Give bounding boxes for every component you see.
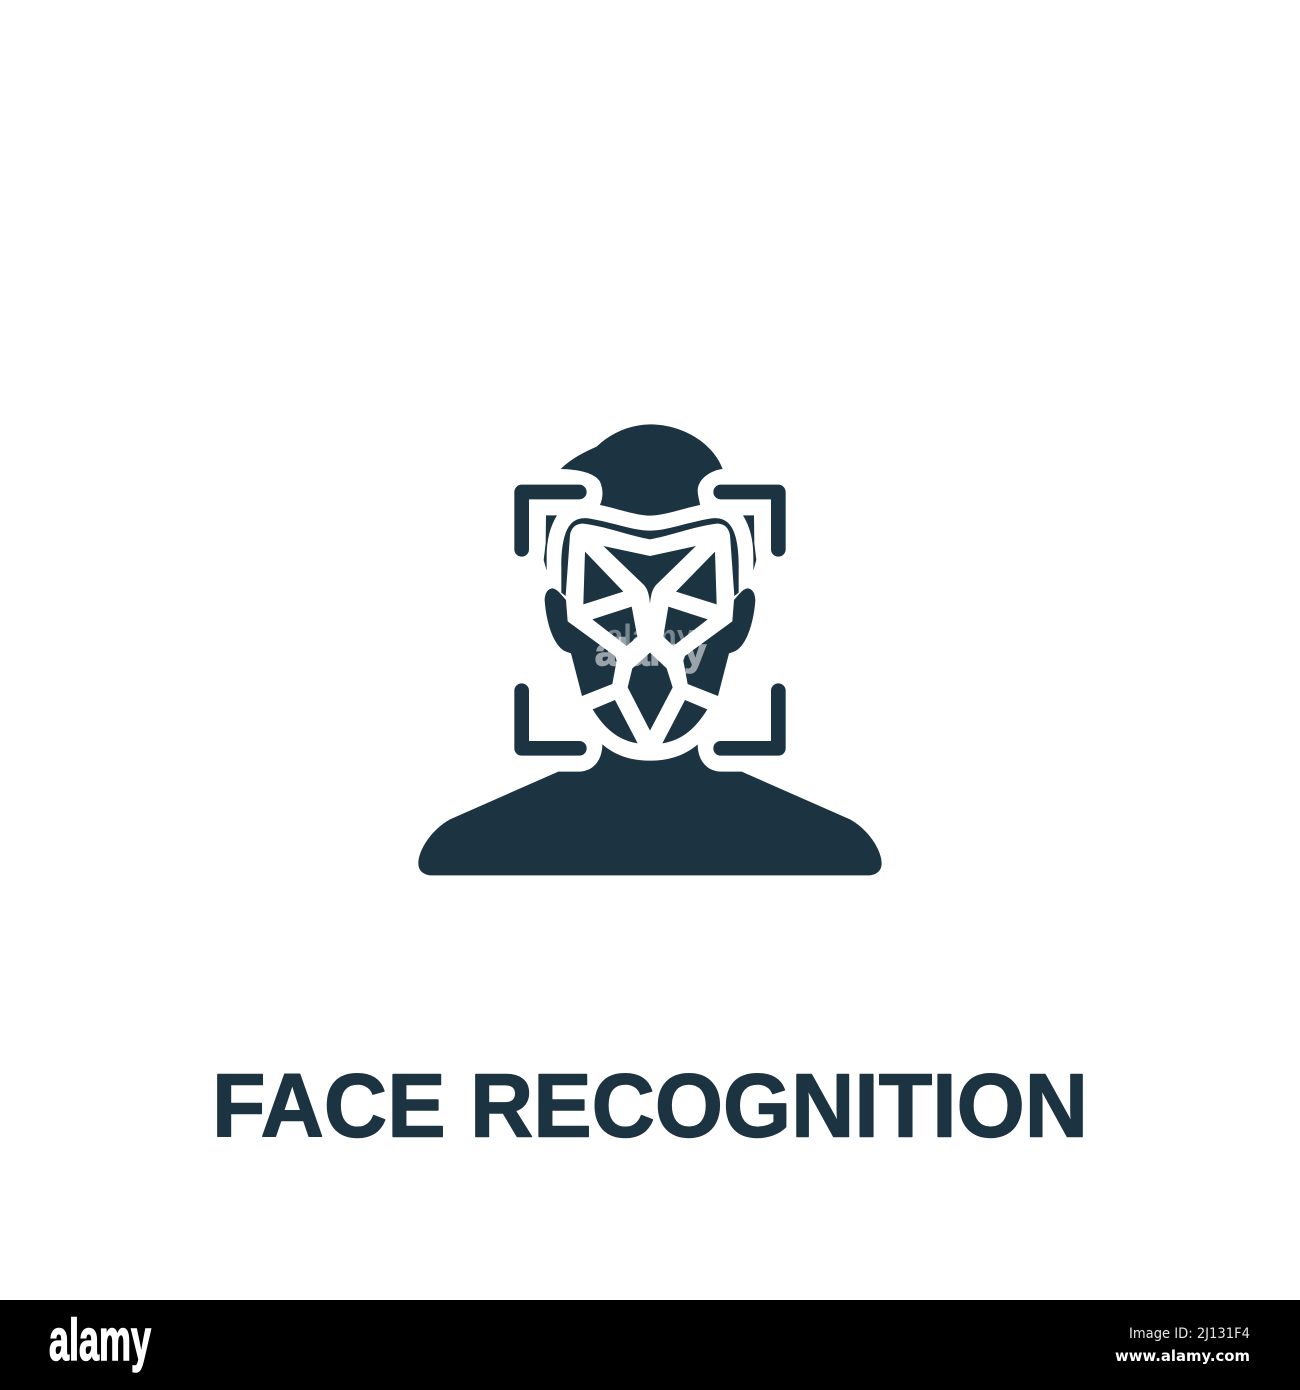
neck and shoulders bbox=[418, 744, 882, 875]
icon: face recognition person bbox=[418, 424, 882, 875]
temples bbox=[544, 515, 557, 571]
hair bbox=[561, 424, 723, 516]
face mesh outline band bbox=[561, 518, 739, 596]
scan frame corners bbox=[522, 492, 778, 748]
footer logo: alamy bbox=[49, 1308, 151, 1373]
left ear and cheek bbox=[545, 588, 617, 696]
right ear and cheek bbox=[683, 588, 755, 696]
watermark on icon: alamy bbox=[606, 618, 694, 654]
website: www.alamy.com bbox=[1115, 1347, 1250, 1365]
watermark on icon: alamy bbox=[595, 632, 706, 674]
black footer bar bbox=[0, 1300, 1300, 1390]
title: FACE RECOGNITION bbox=[212, 1056, 1088, 1156]
mesh facets bbox=[583, 552, 623, 604]
image id: Image ID: 2J131F4 bbox=[1129, 1326, 1250, 1342]
